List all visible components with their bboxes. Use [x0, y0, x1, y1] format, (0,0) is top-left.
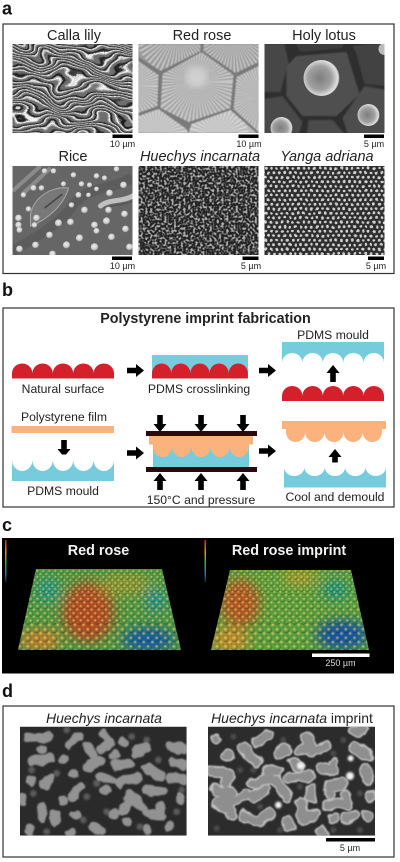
3D surface: Red rose imprint	[211, 570, 369, 650]
label: Yanga adriana: Yanga adriana	[280, 149, 374, 165]
scale bar: Calla lily	[110, 134, 135, 149]
step: 150°C and pressure: 150°C and pressure	[147, 493, 255, 507]
scale bar: Rice	[110, 256, 135, 271]
arrow up	[328, 449, 342, 466]
step: PDMS crosslinking	[148, 355, 250, 396]
scale bar: 5 µm: 5 µm	[340, 843, 360, 853]
scale bar: Rice: 10 µm	[110, 261, 135, 271]
arrow	[259, 444, 276, 458]
step: polystyrene film and mould	[12, 410, 114, 498]
arrow	[127, 364, 144, 377]
scale bar: Huechys incarnata: 5 µm	[241, 261, 261, 271]
colour scale left	[5, 540, 6, 582]
image: Huechys incarnata	[20, 727, 187, 836]
scale bar: Huechys incarnata	[241, 256, 261, 271]
image: Red rose	[138, 44, 258, 133]
panel c: 3D surface maps	[2, 538, 394, 674]
image: Rice	[12, 166, 133, 257]
panel d: Huechys incarnata comparison	[3, 706, 394, 857]
panel label c: c	[2, 515, 12, 535]
step: natural surface: Natural surface	[22, 382, 105, 396]
step: cool and demould	[282, 421, 386, 504]
arrow up	[326, 365, 340, 382]
step: cool and demould: Cool and demould	[286, 490, 384, 504]
image: Yanga adriana	[264, 166, 384, 255]
panel label d: d	[2, 681, 13, 701]
panel a: natural surfaces	[0, 0, 394, 274]
label: Holy lotus: Holy lotus	[292, 28, 356, 44]
label: Red rose imprint: Red rose imprint	[232, 543, 346, 559]
scale bar: 250 µm: 250 µm	[325, 658, 356, 668]
label: Red rose: Red rose	[173, 28, 231, 44]
image: Holy lotus	[264, 44, 384, 133]
panel b: polystyrene imprint fabrication	[3, 308, 394, 507]
scale bar: Holy lotus: 5 µm	[364, 139, 384, 149]
step: polystyrene film and mould: Polystyrene film	[21, 410, 107, 424]
label: Huechys incarnata: Huechys incarnata	[46, 710, 162, 726]
scale bar: 250 µm	[312, 654, 370, 668]
3D surface: Red rose	[18, 569, 181, 650]
image: Calla lily	[12, 44, 132, 133]
scale bar: Yanga adriana: 5 µm	[366, 261, 386, 271]
step: polystyrene film and mould: PDMS mould	[27, 484, 99, 498]
step: natural surface	[12, 364, 114, 396]
image: Huechys incarnata imprint	[208, 727, 375, 836]
colour scale right	[204, 540, 206, 582]
arrow down	[58, 440, 70, 457]
scale bar: Holy lotus	[364, 134, 384, 149]
step: 150°C and pressure	[146, 415, 257, 507]
arrow	[259, 364, 276, 377]
scale bar: Yanga adriana	[366, 256, 386, 271]
scale bar: Calla lily: 10 µm	[110, 139, 135, 149]
step: PDMS crosslinking: PDMS crosslinking	[148, 382, 250, 396]
scale bar: Red rose	[236, 134, 262, 149]
arrow	[127, 446, 144, 460]
label: Huechys incarnata: Huechys incarnata	[140, 149, 260, 165]
scale bar: 5 µm	[326, 838, 375, 853]
label: Red rose: Red rose	[68, 543, 129, 559]
panel label b: b	[2, 280, 13, 300]
step: PDMS mould release: PDMS mould	[297, 328, 369, 342]
label: Calla lily: Calla lily	[47, 28, 102, 44]
image: Huechys incarnata	[138, 166, 258, 255]
label: Huechys incarnata imprint: Huechys incarnata imprint	[211, 710, 373, 726]
label: Rice: Rice	[58, 149, 88, 165]
heading: Polystyrene imprint fabrication	[100, 311, 311, 327]
scale bar: Red rose: 10 µm	[236, 139, 262, 149]
step: PDMS mould release	[282, 328, 384, 401]
